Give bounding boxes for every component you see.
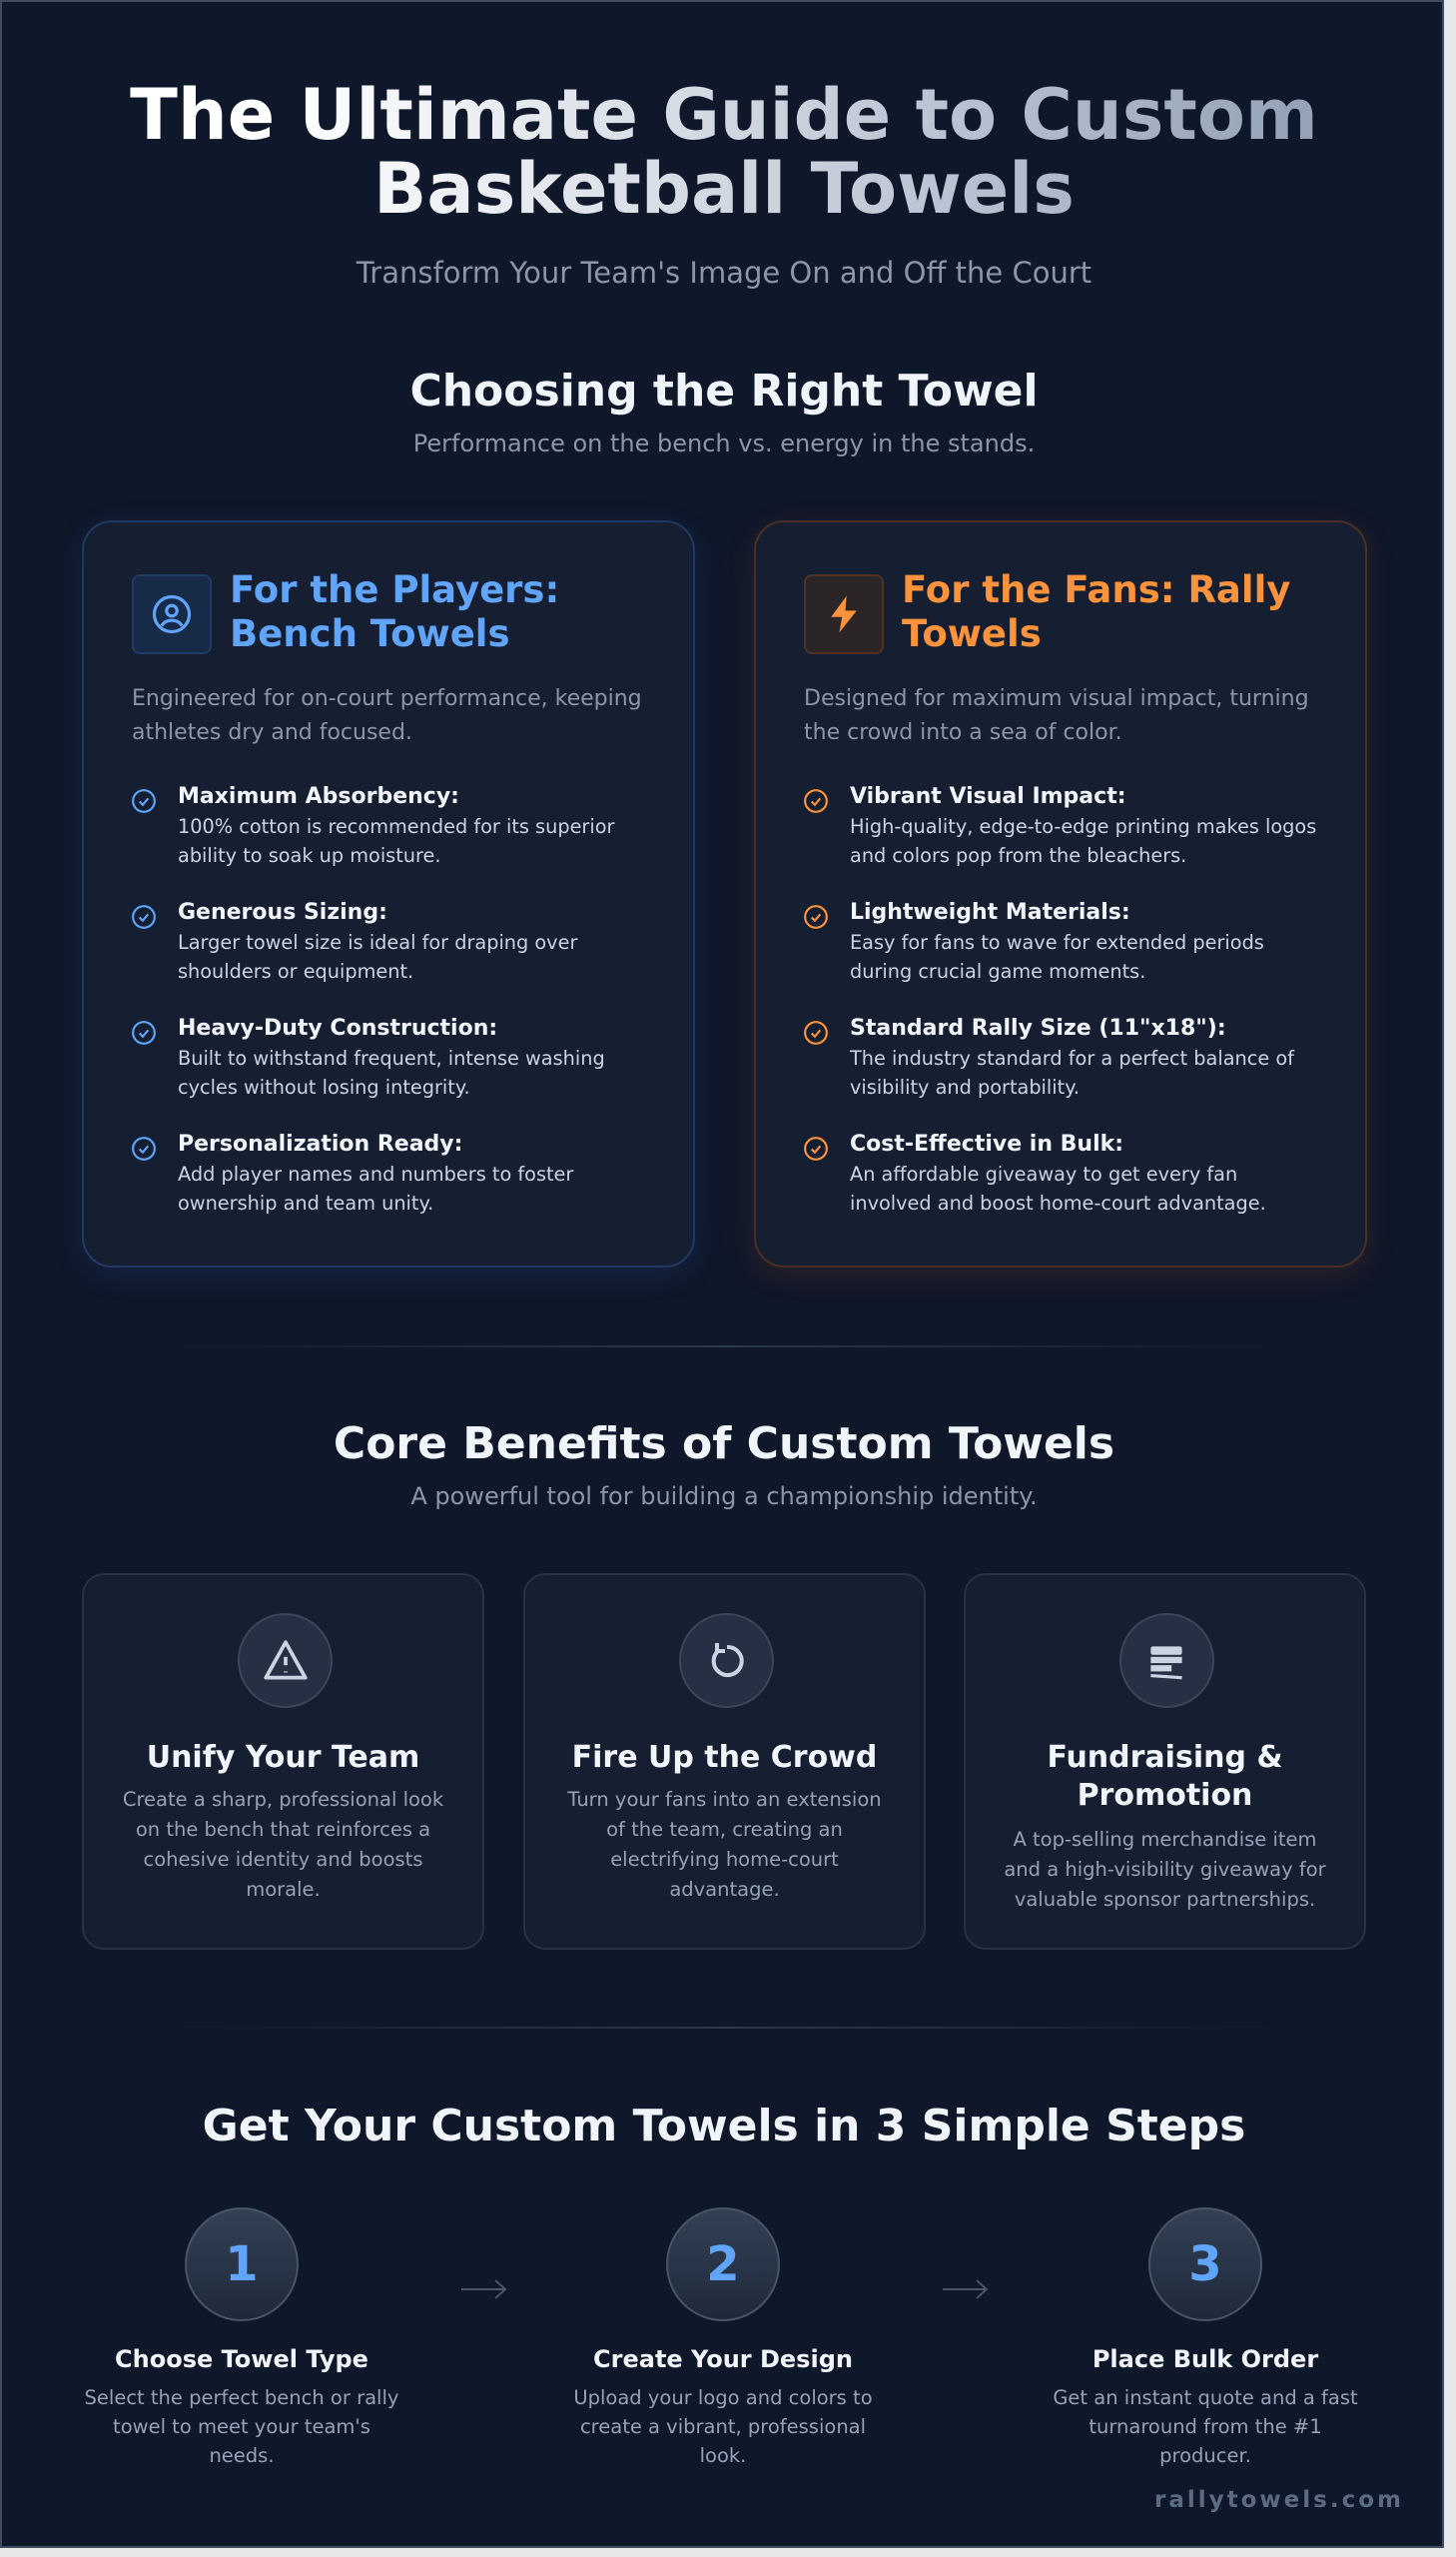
item: construction: Heavy-Duty Construction: bbox=[178, 1016, 497, 1041]
item: construction: Built to withstand frequent, intense washing cycles without losing integrity. bbox=[178, 1047, 605, 1099]
step 2: Upload your logo and colors to bbox=[573, 2386, 873, 2409]
item: sizing bbox=[132, 900, 577, 983]
benefit card: crowd: Fire Up the Crowd bbox=[572, 1740, 877, 1775]
item: lightweight bbox=[804, 900, 1264, 983]
benefit card: crowd bbox=[523, 1573, 926, 1950]
step 3: Place Bulk Order bbox=[1092, 2345, 1318, 2373]
arrow 2 bbox=[943, 2279, 989, 2299]
item: cost: An affordable giveaway to get every fan bbox=[850, 1163, 1237, 1186]
panel title: For the Players: bbox=[230, 568, 559, 611]
step 3 bbox=[1053, 2207, 1358, 2467]
item: size: Standard Rally Size (11"x18"): bbox=[850, 1016, 1226, 1041]
step 2: Create Your Design bbox=[593, 2345, 853, 2373]
step 3: 3 bbox=[1188, 2236, 1222, 2292]
panel title: Towels bbox=[902, 612, 1042, 655]
step 3: Get an instant quote and a fast bbox=[1053, 2386, 1358, 2409]
item: sizing: Generous Sizing: bbox=[178, 900, 387, 925]
item: construction bbox=[132, 1016, 605, 1099]
step 3: producer. bbox=[1159, 2444, 1251, 2467]
item: size bbox=[804, 1016, 1294, 1099]
icon: warning bbox=[238, 1613, 333, 1708]
heading: benefits: Core Benefits of Custom Towels bbox=[334, 1418, 1114, 1469]
benefit card: fundraising: Promotion bbox=[1078, 1778, 1252, 1813]
panel title bbox=[902, 568, 1290, 655]
item: cost: involved and boost home-court advantage. bbox=[850, 1192, 1266, 1215]
step 2 bbox=[573, 2207, 873, 2467]
arrow 1 bbox=[461, 2279, 507, 2299]
panel: players bbox=[82, 520, 695, 1268]
icon: bolt bbox=[804, 574, 884, 654]
item: lightweight: Lightweight Materials: bbox=[850, 900, 1130, 925]
step 1: Select the perfect bench or rally bbox=[85, 2386, 398, 2409]
item: visual impact bbox=[804, 784, 1316, 867]
description: Designed for maximum visual impact, turning the crowd into a sea of color. bbox=[804, 686, 1309, 745]
benefit card: fundraising: Fundraising & bbox=[1047, 1740, 1283, 1775]
title: Basketball Towels bbox=[373, 148, 1075, 230]
item: personalization bbox=[132, 1132, 573, 1215]
panel title bbox=[230, 568, 559, 655]
item: absorbency bbox=[132, 784, 615, 867]
benefit card: unify: Unify Your Team bbox=[147, 1740, 419, 1775]
step 3: turnaround from the #1 bbox=[1089, 2415, 1322, 2438]
benefit card: unify bbox=[82, 1573, 484, 1950]
step 1: Choose Towel Type bbox=[115, 2345, 368, 2373]
item: lightweight: Easy for fans to wave for extended periods during crucial game moments. bbox=[850, 931, 1264, 983]
footer brand: rallytowels.com bbox=[1154, 2487, 1404, 2513]
step 1: towel to meet your team's bbox=[113, 2415, 370, 2438]
step 1: needs. bbox=[209, 2444, 275, 2467]
panel title: For the Fans: Rally bbox=[902, 568, 1290, 611]
benefit card: fundraising: and a high-visibility giveaway for valuable sponsor partnerships. bbox=[1004, 1858, 1326, 1911]
item: visual impact: Vibrant Visual Impact: bbox=[850, 784, 1126, 809]
step 2: 2 bbox=[706, 2236, 740, 2292]
feature list bbox=[132, 784, 615, 1215]
description: Engineered for on-court performance, keeping athletes dry and focused. bbox=[132, 686, 642, 745]
benefit card: fundraising: A top-selling merchandise item bbox=[1013, 1828, 1317, 1851]
title bbox=[2, 78, 1446, 226]
item: visual impact: High-quality, edge-to-edge printing makes logos and colors pop from the bleachers. bbox=[850, 815, 1316, 867]
item: cost bbox=[804, 1132, 1266, 1215]
benefit card: crowd: Turn your fans into an extension of the team, creating an electrifying home-court advantage. bbox=[567, 1788, 882, 1901]
subheading: benefits: A powerful tool for building a championship identity. bbox=[410, 1482, 1038, 1510]
icon: user bbox=[132, 574, 212, 654]
item: cost: Cost-Effective in Bulk: bbox=[850, 1132, 1123, 1157]
item: personalization: Add player names and numbers to foster ownership and team unity. bbox=[178, 1163, 573, 1215]
feature list bbox=[804, 784, 1316, 1215]
panel title: Bench Towels bbox=[230, 612, 510, 655]
title: The Ultimate Guide to Custom bbox=[130, 74, 1318, 156]
item: absorbency: 100% cotton is recommended for its superior ability to soak up moisture. bbox=[178, 815, 614, 867]
item: sizing: Larger towel size is ideal for draping over shoulders or equipment. bbox=[178, 931, 577, 983]
subheading: choosing: Performance on the bench vs. energy in the stands. bbox=[413, 429, 1035, 457]
step 1: 1 bbox=[225, 2236, 259, 2292]
subtitle: Transform Your Team's Image On and Off the Court bbox=[357, 256, 1092, 290]
icon: card bbox=[1119, 1613, 1214, 1708]
heading: choosing: Choosing the Right Towel bbox=[409, 366, 1039, 417]
benefit card: fundraising bbox=[964, 1573, 1366, 1950]
step 2: look. bbox=[700, 2444, 746, 2467]
item: size: The industry standard for a perfect balance of visibility and portability. bbox=[850, 1047, 1294, 1099]
panel: fans bbox=[754, 520, 1367, 1268]
icon: refresh bbox=[679, 1613, 774, 1708]
item: personalization: Personalization Ready: bbox=[178, 1132, 462, 1157]
step 2: create a vibrant, professional bbox=[580, 2415, 866, 2438]
item: absorbency: Maximum Absorbency: bbox=[178, 784, 459, 809]
step 1 bbox=[85, 2207, 398, 2467]
heading: steps: Get Your Custom Towels in 3 Simple Steps bbox=[203, 2101, 1245, 2151]
benefit card: unify: Create a sharp, professional look on the bench that reinforces a cohesive identity and boosts morale. bbox=[123, 1788, 443, 1901]
